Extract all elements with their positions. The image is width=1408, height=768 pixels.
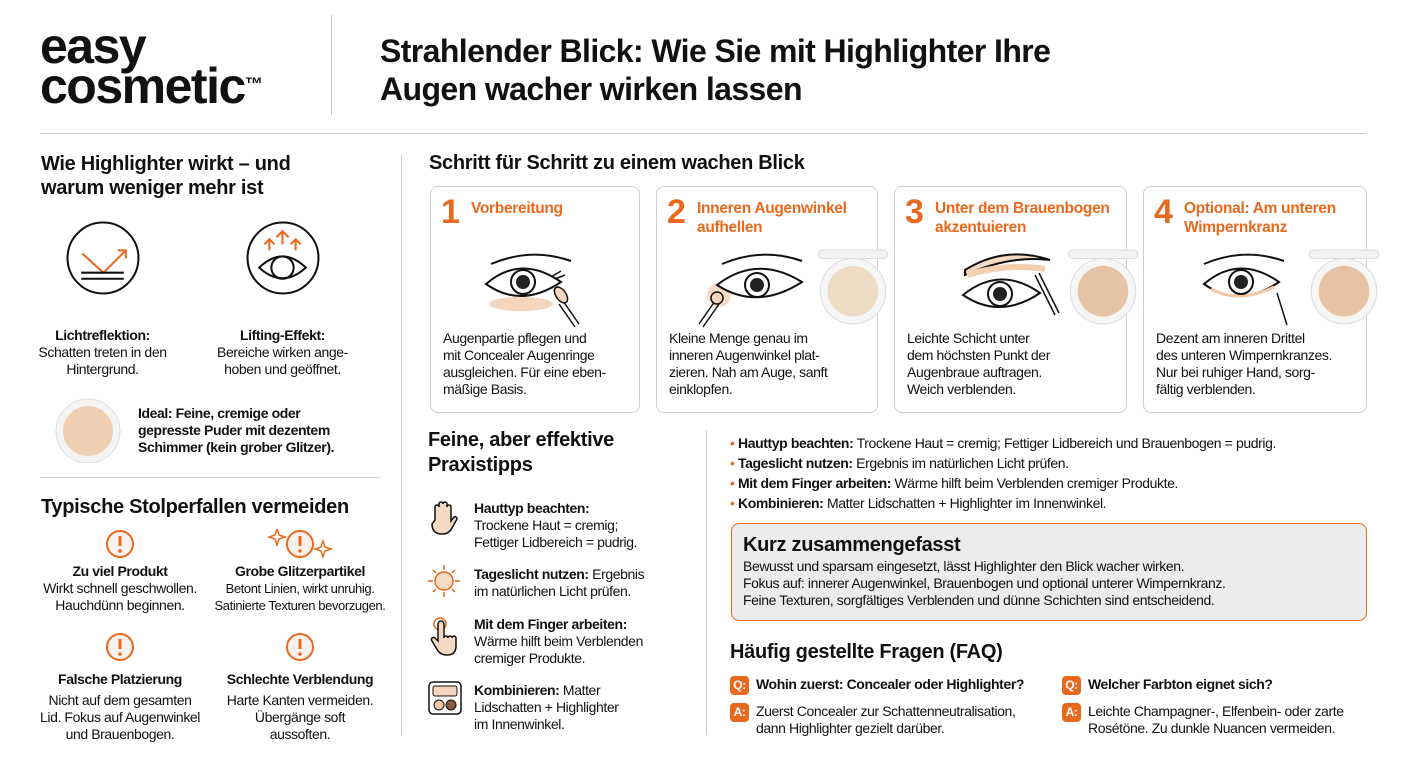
heading: pitfalls: Typische Stolperfallen vermeiden xyxy=(41,496,349,518)
tip 3 xyxy=(474,616,643,666)
panel: practical tips xyxy=(428,429,644,732)
heading: how it works: warum weniger mehr ist xyxy=(41,177,263,199)
tip 1: Trockene Haut = cremig; xyxy=(474,517,618,533)
heading: how it works xyxy=(41,153,291,199)
icon: palette xyxy=(428,681,462,715)
card: step 2: 2 xyxy=(667,193,686,231)
heading: how it works: Wie Highlighter wirkt – und xyxy=(41,153,291,175)
tip 4: Kombinieren: Matter xyxy=(474,682,600,698)
card: step 4: fältig verblenden. xyxy=(1156,381,1255,397)
pitfall 3: Falsche Platzierung xyxy=(58,671,182,687)
pitfall 2: Satinierte Texturen bevorzugen. xyxy=(215,598,385,613)
text: ideal: gepresste Puder mit dezentem xyxy=(138,422,330,438)
icon: eye inner corner xyxy=(698,254,804,328)
FAQ 2: Leichte Champagner-, Elfenbein- oder zarte xyxy=(1088,703,1344,719)
tip 2: Tageslicht nutzen: Ergebnis xyxy=(474,566,644,582)
pitfall 3 xyxy=(40,633,200,742)
pitfall 3: Lid. Fokus auf Augenwinkel xyxy=(40,709,200,725)
logo: cosmetic™ xyxy=(40,58,261,114)
card: step 2: aufhellen xyxy=(697,219,762,236)
card: step 4: des unteren Wimpernkranzes. xyxy=(1156,347,1332,363)
tip 2 xyxy=(474,566,644,599)
tip 4: Lidschatten + Highlighter xyxy=(474,699,618,715)
card: step 4 xyxy=(1143,186,1367,413)
bullet list: • Mit dem Finger arbeiten: Wärme hilft beim Verblenden cremiger Produkte. xyxy=(730,475,1178,491)
tip 4 xyxy=(474,682,619,732)
tip 2: im natürlichen Licht prüfen. xyxy=(474,583,631,599)
pitfall 1: Hauchdünn beginnen. xyxy=(55,597,185,613)
pitfall 2: Betont Linien, wirkt unruhig. xyxy=(226,581,374,596)
card: step 3: Unter dem Brauenbogen xyxy=(935,200,1110,217)
pitfall 4: aussoften. xyxy=(270,726,330,742)
pitfall 3: und Brauenbogen. xyxy=(66,726,174,742)
tip 1 xyxy=(474,500,637,550)
logo xyxy=(40,18,261,114)
callout: summary: Feine Texturen, sorgfältiges Verblenden und dünne Schichten sind entscheidend. xyxy=(743,592,1214,608)
pitfall 1: Wirkt schnell geschwollen. xyxy=(43,580,197,596)
bullet list: • Tageslicht nutzen: Ergebnis im natürlichen Licht prüfen. xyxy=(730,455,1069,471)
text: light reflection: Schatten treten in den xyxy=(38,344,167,360)
card: step 4: 4 xyxy=(1154,193,1173,231)
card: step 1: mit Concealer Augenringe xyxy=(443,347,594,363)
icon: sun xyxy=(428,565,460,597)
pitfall 4: Schlechte Verblendung xyxy=(227,671,373,687)
card: step 3: akzentuieren xyxy=(935,219,1026,236)
card: step 4: Dezent am inneren Drittel xyxy=(1156,330,1305,346)
heading: FAQ: Häufig gestellte Fragen (FAQ) xyxy=(730,641,1002,663)
icon: eye brow xyxy=(961,253,1060,316)
card: step 2: einklopfen. xyxy=(669,381,732,397)
pitfall 2: Grobe Glitzerpartikel xyxy=(235,563,365,579)
card: step 1: Augenpartie pflegen und xyxy=(443,330,586,346)
FAQ 2: Welcher Farbton eignet sich? xyxy=(1088,676,1273,692)
card: step 1: mäßige Basis. xyxy=(443,381,526,397)
icon: compact xyxy=(1308,250,1380,324)
callout: summary xyxy=(731,523,1367,621)
callout: summary: Bewusst und sparsam eingesetzt, lässt Highlighter den Blick wacher wirken. xyxy=(743,558,1184,574)
card: step 2: zieren. Nah am Auge, sanft xyxy=(669,364,827,380)
pitfall 2 xyxy=(215,529,385,613)
FAQ 2 xyxy=(1062,676,1344,736)
card: step 1 xyxy=(430,186,640,413)
callout: summary: Fokus auf: innerer Augenwinkel, Brauenbogen und optional unterer Wimpernkranz. xyxy=(743,575,1225,591)
text: light reflection: Hintergrund. xyxy=(66,361,139,377)
FAQ 2: Rosétöne. Zu dunkle Nuancen vermeiden. xyxy=(1088,720,1335,736)
panel: how highlighter works xyxy=(38,153,348,463)
card: step 2: inneren Augenwinkel plat- xyxy=(669,347,819,363)
card: step 2: Inneren Augenwinkel xyxy=(697,200,847,217)
card: step 1: 1 xyxy=(441,193,460,231)
text: lifting: Lifting-Effekt: xyxy=(240,327,325,343)
FAQ 2: Q: xyxy=(1065,678,1078,692)
bullet list: • Hauttyp beachten: Trockene Haut = cremig; Fettiger Lidbereich und Brauenbogen = pudrig. xyxy=(730,435,1276,451)
card: step 3 xyxy=(894,186,1127,413)
FAQ 2: A: xyxy=(1066,705,1077,719)
tip 1: Hauttyp beachten: xyxy=(474,500,589,516)
icon: light reflection xyxy=(66,222,140,294)
card: step 2 xyxy=(656,186,878,413)
text: lifting xyxy=(217,327,348,377)
pitfall 3: Nicht auf dem gesamten xyxy=(49,692,191,708)
tip 3: cremiger Produkte. xyxy=(474,650,585,666)
heading: tips xyxy=(428,429,614,476)
pitfall 1: Zu viel Produkt xyxy=(72,563,168,579)
text: ideal: Schimmer (kein grober Glitzer). xyxy=(138,439,334,455)
text: lifting: hoben und geöffnet. xyxy=(224,361,341,377)
tip 4: im Innenwinkel. xyxy=(474,716,564,732)
tip 3: Wärme hilft beim Verblenden xyxy=(474,633,643,649)
card: step 4: Optional: Am unteren xyxy=(1184,200,1336,217)
card: step 2: Kleine Menge genau im xyxy=(669,330,808,346)
card: step 3: Leichte Schicht unter xyxy=(907,330,1029,346)
card: step 3: Augenbraue auftragen. xyxy=(907,364,1042,380)
FAQ 1: Zuerst Concealer zur Schattenneutralisation, xyxy=(756,703,1015,719)
text: lifting: Bereiche wirken ange- xyxy=(217,344,348,360)
icon: compact xyxy=(1068,250,1138,324)
card: step 3: Weich verblenden. xyxy=(907,381,1016,397)
pitfall 4: Übergänge soft xyxy=(255,709,345,725)
icon: finger xyxy=(430,617,457,656)
icon: compact xyxy=(818,250,888,324)
bullet list: • Kombinieren: Matter Lidschatten + Highlighter im Innenwinkel. xyxy=(730,495,1106,511)
heading: tips: Feine, aber effektive xyxy=(428,429,614,451)
pitfall 4: Harte Kanten vermeiden. xyxy=(227,692,373,708)
callout: summary: Kurz zusammengefasst xyxy=(743,534,960,556)
text: ideal: Ideal: Feine, cremige oder xyxy=(138,405,300,421)
tip 3: Mit dem Finger arbeiten: xyxy=(474,616,627,632)
card: step 4: Nur bei ruhiger Hand, sorg- xyxy=(1156,364,1315,380)
pitfall 1 xyxy=(43,530,197,613)
FAQ 1: dann Highlighter gezielt darüber. xyxy=(756,720,944,736)
icon: lifting eye xyxy=(246,222,320,294)
card: step 1: ausgleichen. Für eine eben- xyxy=(443,364,606,380)
title: Strahlender Blick: Wie Sie mit Highlighter Ihre xyxy=(380,33,1050,69)
heading: steps: Schritt für Schritt zu einem wachen Blick xyxy=(429,152,805,174)
text: light reflection xyxy=(38,327,167,377)
card: step 3: 3 xyxy=(905,193,924,231)
tip 1: Fettiger Lidbereich = pudrig. xyxy=(474,534,637,550)
icon: hand xyxy=(431,501,458,535)
icon: eye lower lash xyxy=(1202,254,1288,326)
heading: tips: Praxistipps xyxy=(428,454,533,476)
title xyxy=(380,33,1050,107)
card: step 4: Wimpernkranz xyxy=(1184,219,1287,236)
bullet list xyxy=(730,435,1276,511)
FAQ 1: Q: xyxy=(733,678,746,692)
icon: compact powder xyxy=(56,398,120,463)
card: step 3: dem höchsten Punkt der xyxy=(907,347,1050,363)
icon: eye concealer xyxy=(484,254,580,328)
card: step 1: Vorbereitung xyxy=(471,200,563,217)
FAQ 1 xyxy=(730,676,1024,736)
title: Augen wacher wirken lassen xyxy=(380,71,802,107)
FAQ 1: A: xyxy=(734,705,745,719)
pitfall 4 xyxy=(227,633,373,742)
logo: easy xyxy=(40,18,145,74)
text: ideal xyxy=(138,405,334,455)
FAQ 1: Wohin zuerst: Concealer oder Highlighter? xyxy=(756,676,1024,692)
panel: pitfalls xyxy=(40,496,385,742)
text: light reflection: Lichtreflektion: xyxy=(55,327,150,343)
